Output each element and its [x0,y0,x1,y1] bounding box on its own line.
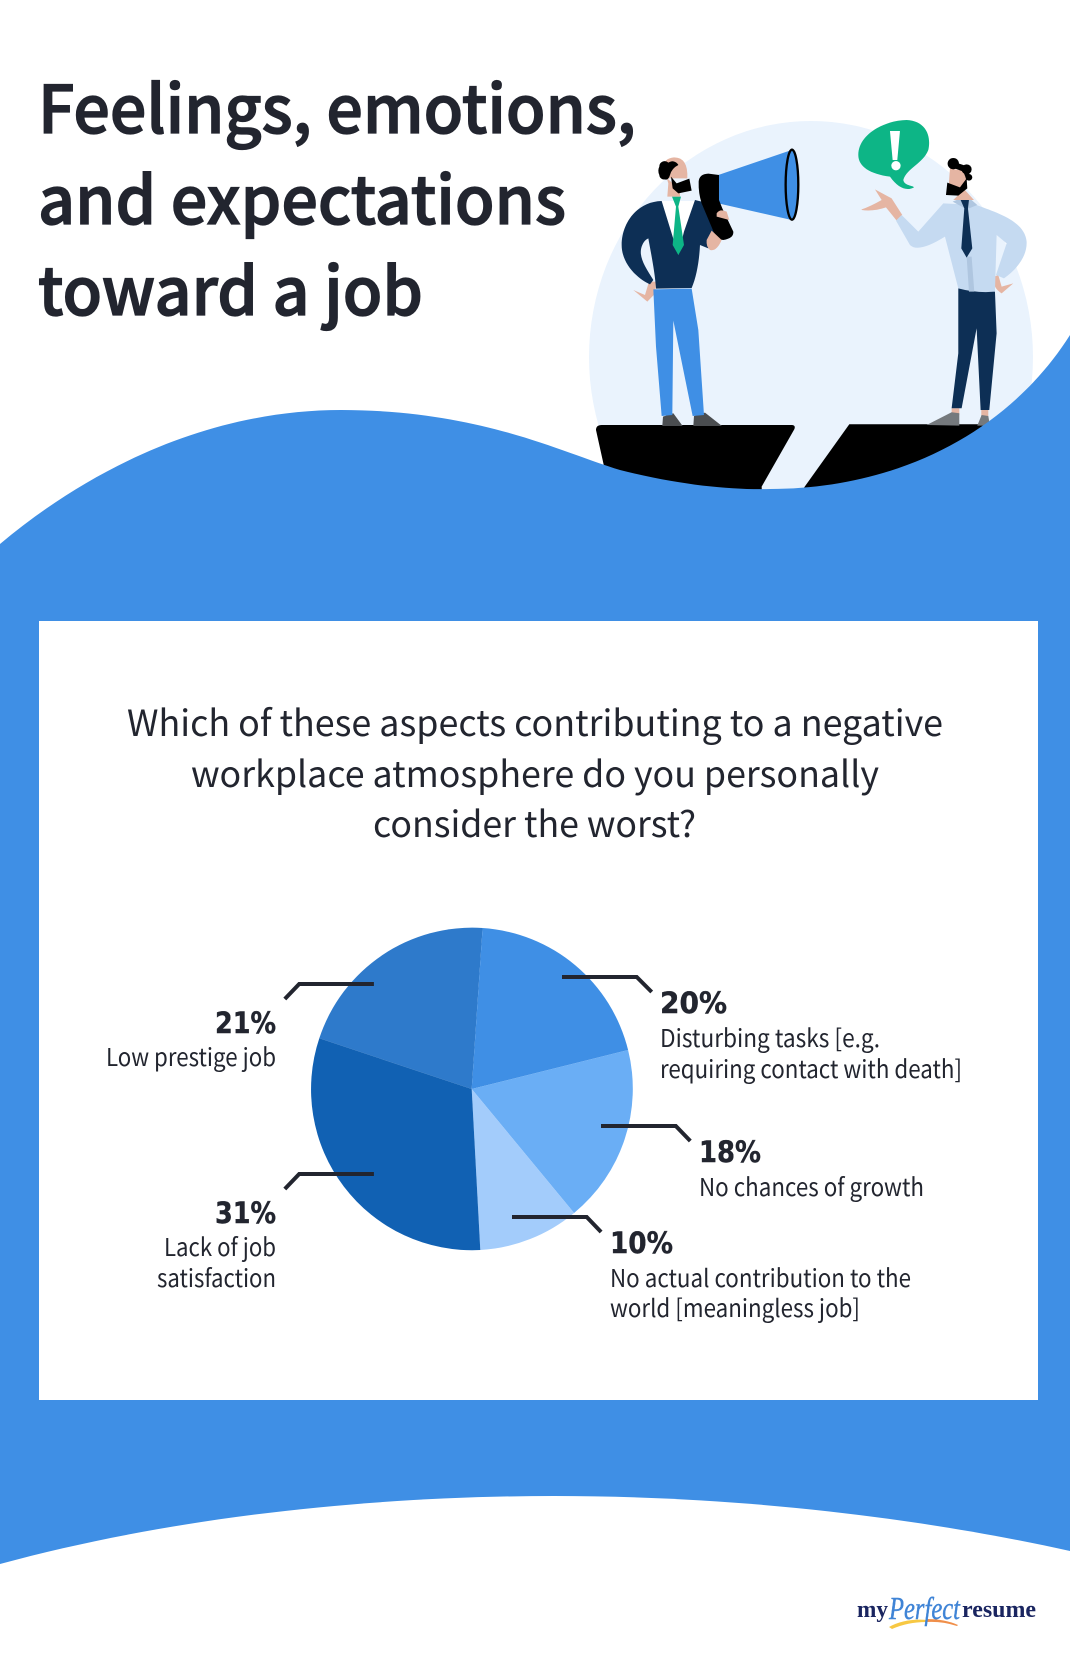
label: 31% lack of job satisfaction: satisfaction [157,1260,276,1295]
logo: myPerfectResume: resume [962,1597,1036,1623]
bottom white curve [0,1496,1070,1669]
question heading: Which of these aspects contributing to a negative [127,695,943,747]
label: 20% disturbing tasks: 20% [660,986,727,1020]
label: 10% no actual contribution [512,1217,911,1325]
question heading: consider the worst? [373,796,696,848]
slice: 21% low prestige job [319,928,483,1089]
label: 31% lack of job satisfaction: Lack of job [164,1229,276,1264]
slice: 20% disturbing tasks [472,928,628,1089]
label: 18% no chances of growth: 18% [699,1135,761,1169]
slice: 10% no actual contribution [472,1089,574,1250]
label: 10% no actual contribution: 10% [610,1226,673,1260]
slice: 18% no chances of growth [472,1050,633,1213]
title [38,57,636,335]
illustration: two men arguing across a gap [589,120,1037,593]
label: 18% no chances of growth: No chances of growth [699,1169,924,1204]
question heading [127,695,943,848]
backdrop circle [589,121,1033,593]
man with raised hand [862,158,1027,426]
man with megaphone [622,150,798,426]
panel background [39,621,1038,1400]
title: Feelings, emotions, [38,57,636,153]
question heading: workplace atmosphere do you personally [191,746,879,798]
label: 18% no chances of growth [601,1126,924,1204]
label: 31% lack of job satisfaction: 31% [215,1196,276,1230]
logo: myPerfectResume [857,1590,1036,1629]
label: 10% no actual contribution: No actual contribution to the [610,1260,911,1295]
label: 20% disturbing tasks: requiring contact with death] [660,1051,962,1086]
title: and expectations [38,148,566,244]
platforms [596,424,1037,520]
logo: myPerfectResume: Perfect [888,1590,961,1626]
label: 31% lack of job satisfaction [157,1174,374,1295]
label: 20% disturbing tasks [562,977,962,1086]
label: 21% low prestige job: 21% [215,1006,276,1040]
label: 10% no actual contribution: world [meaningless job] [610,1290,860,1325]
blue wave background [0,335,1070,1669]
label: 21% low prestige job [106,984,374,1074]
label: 20% disturbing tasks: Disturbing tasks [e.g. [660,1020,880,1055]
label: 21% low prestige job: Low prestige job [106,1039,276,1074]
pie chart [311,928,633,1250]
slice: 31% lack of job satisfaction [311,1038,480,1250]
title: toward a job [38,239,423,335]
panel: survey question [39,621,1038,1400]
speech bubble with exclamation mark [858,120,929,189]
logo: myPerfectResume: my [857,1597,888,1623]
